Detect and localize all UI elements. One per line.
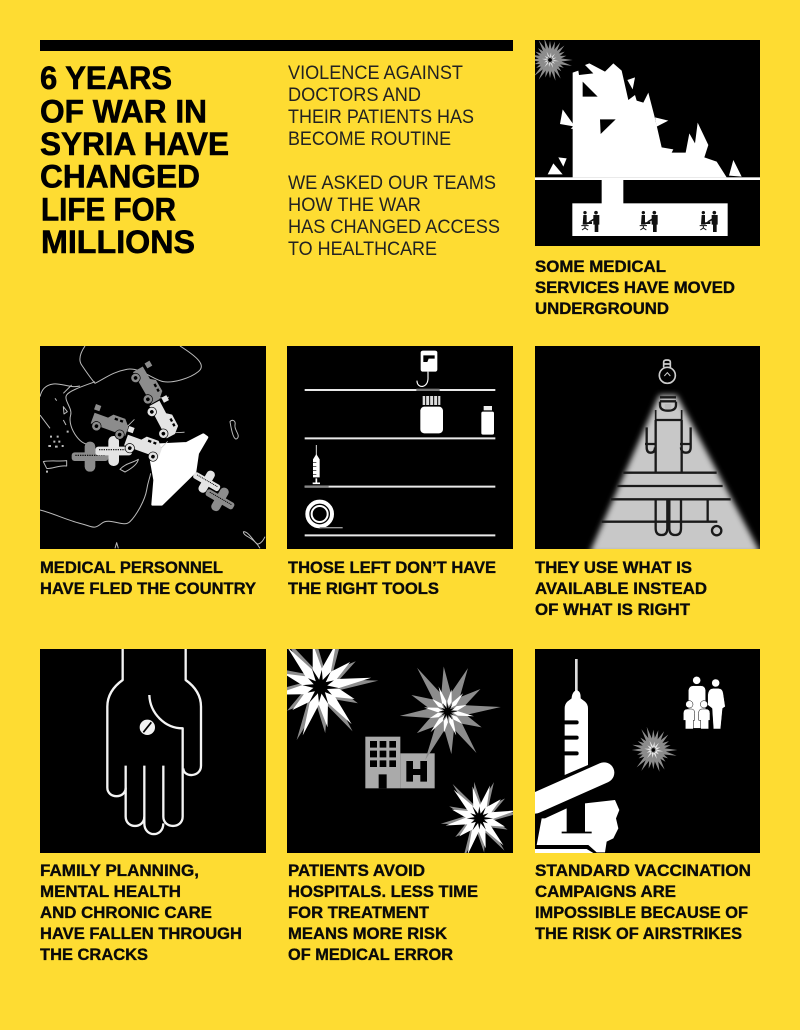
icon: doctor and patient pairs — [581, 211, 718, 232]
icon: hospital building — [365, 737, 435, 788]
intro text: THEIR PATIENTS HAS — [288, 107, 474, 128]
icon: explosion — [632, 727, 677, 772]
map coastlines — [40, 346, 265, 548]
shelves — [305, 390, 495, 535]
icon: family — [683, 676, 725, 729]
caption: available instead: OF WHAT IS RIGHT — [535, 600, 691, 619]
caption: personnel fled: MEDICAL PERSONNEL — [40, 558, 223, 577]
title: 6 YEARS — [40, 60, 172, 96]
panel: medical tools on shelves — [287, 346, 513, 549]
caption: fallen through the cracks: AND CHRONIC CARE — [40, 903, 212, 922]
icon: IV bag — [416, 351, 440, 391]
caption: vaccination campaigns: STANDARD VACCINATION — [535, 861, 751, 880]
caption: fallen through the cracks: THE CRACKS — [40, 945, 148, 964]
title: OF WAR IN — [40, 94, 207, 130]
caption: fallen through the cracks: HAVE FALLEN THROUGH — [40, 924, 242, 943]
title: MILLIONS — [41, 224, 195, 260]
caption: patients avoid hospitals — [288, 861, 478, 964]
panel: improvised operating table — [535, 346, 761, 553]
panel: hand with pill — [40, 649, 266, 853]
icon: large jar — [420, 396, 443, 433]
icon: explosion top left — [287, 649, 378, 740]
top black bar — [40, 40, 513, 51]
title: CHANGED — [40, 158, 200, 194]
caption: fallen through the cracks: MENTAL HEALTH — [40, 882, 181, 901]
caption: underground — [535, 257, 735, 318]
caption: personnel fled: HAVE FLED THE COUNTRY — [40, 579, 257, 598]
caption: patients avoid hospitals: FOR TREATMENT — [288, 903, 430, 922]
icon: gray plane west — [72, 442, 108, 472]
intro text: WE ASKED OUR TEAMS — [288, 173, 496, 194]
caption: patients avoid hospitals: PATIENTS AVOID — [288, 861, 425, 880]
icon: explosion bottom right — [441, 782, 513, 853]
caption: right tools — [288, 558, 496, 598]
light cone — [589, 395, 761, 553]
icon: explosion top right — [400, 666, 500, 760]
icon: explosion — [535, 40, 572, 80]
caption: right tools: THE RIGHT TOOLS — [288, 579, 439, 598]
caption: available instead: AVAILABLE INSTEAD — [535, 579, 707, 598]
underground room — [572, 178, 728, 236]
icon: bandage roll — [307, 502, 343, 528]
intro text — [288, 63, 500, 260]
icon: small bottle — [481, 406, 494, 435]
panel: vaccination and airstrikes — [535, 649, 760, 853]
icon: white plane west — [95, 436, 132, 466]
caption: patients avoid hospitals: OF MEDICAL ERROR — [288, 945, 453, 964]
title — [40, 60, 229, 260]
caption: vaccination campaigns: THE RISK OF AIRSTRIKES — [535, 924, 742, 943]
icon: gray plane east — [206, 488, 234, 512]
icon: hand holding syringe — [535, 773, 619, 853]
icon: syringe — [565, 659, 588, 775]
caption: vaccination campaigns — [535, 861, 751, 943]
intro text: HOW THE WAR — [288, 195, 421, 216]
panel: underground medical services — [525, 36, 760, 246]
icon: ruined building — [548, 63, 742, 177]
icon: open hand outline — [107, 649, 201, 834]
intro text: VIOLENCE AGAINST — [288, 63, 463, 84]
intro text: BECOME ROUTINE — [288, 129, 451, 150]
caption: right tools: THOSE LEFT DON’T HAVE — [288, 558, 496, 577]
caption: underground: SERVICES HAVE MOVED — [535, 278, 735, 297]
icon: gray jeep north — [131, 360, 169, 404]
caption: available instead: THEY USE WHAT IS — [535, 558, 692, 577]
intro text: HAS CHANGED ACCESS — [288, 217, 500, 238]
caption: patients avoid hospitals: HOSPITALS. LESS TIME — [288, 882, 478, 901]
icon: syringe — [305, 445, 329, 488]
panel: hospital and explosions — [287, 649, 513, 853]
icon: light bulb — [659, 360, 675, 383]
caption: available instead — [535, 558, 707, 619]
caption: vaccination campaigns: IMPOSSIBLE BECAUSE OF — [535, 903, 748, 922]
caption: patients avoid hospitals: MEANS MORE RISK — [288, 924, 448, 943]
caption: underground: UNDERGROUND — [535, 299, 669, 318]
icon: gray jeep west — [90, 404, 135, 440]
caption: vaccination campaigns: CAMPAIGNS ARE — [535, 882, 676, 901]
icon: pill — [140, 720, 155, 735]
intro text: TO HEALTHCARE — [288, 239, 437, 260]
icon: Syria silhouette — [151, 435, 207, 504]
caption: personnel fled — [40, 558, 257, 598]
intro text: DOCTORS AND — [288, 85, 421, 106]
icon: white plane east — [193, 470, 220, 493]
caption: fallen through the cracks: FAMILY PLANNING, — [40, 861, 199, 880]
icon: white jeep north — [148, 395, 185, 438]
title: SYRIA HAVE — [40, 126, 229, 162]
panel: map of personnel fleeing — [40, 346, 266, 549]
icon: white jeep west — [124, 426, 168, 462]
caption: underground: SOME MEDICAL — [535, 257, 666, 276]
ground line — [535, 177, 760, 180]
caption: fallen through the cracks — [40, 861, 242, 964]
title: LIFE FOR — [41, 192, 176, 228]
icon: patient on table — [602, 397, 731, 535]
